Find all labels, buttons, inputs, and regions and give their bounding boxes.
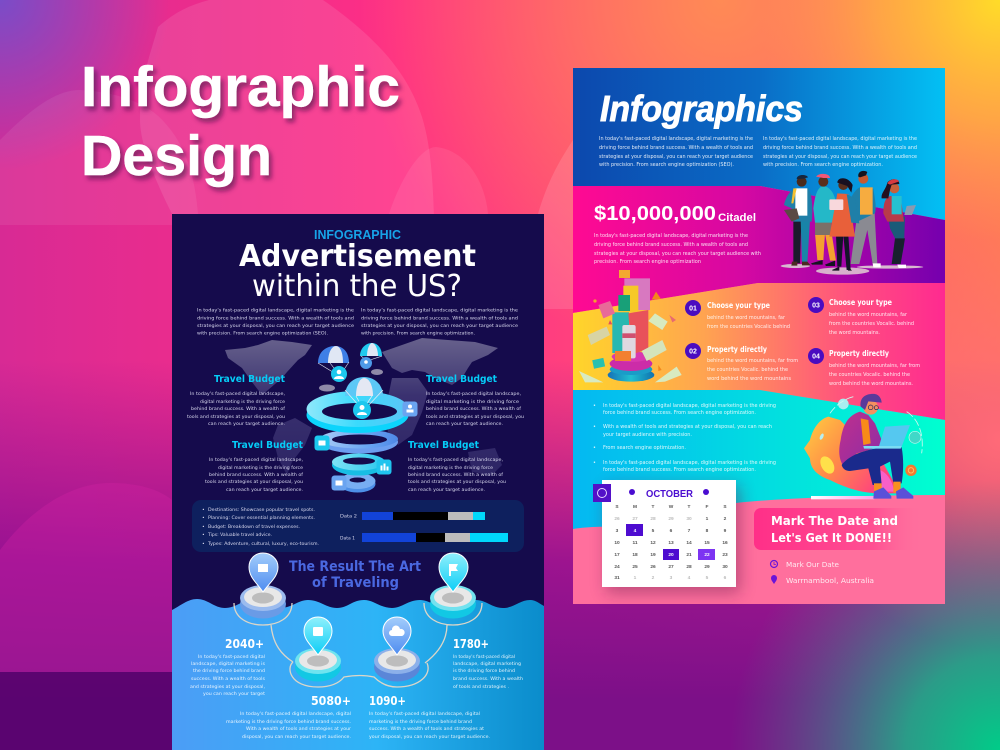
amount text: In today's fast-paced digital landscape, digital marketing is the	[594, 233, 748, 239]
block: travel budget bottom right: In today's fast-paced digital landscape,	[408, 457, 504, 463]
block: travel budget top left: tools and strategies at your disposal, you	[187, 414, 285, 420]
pin: calendar	[295, 617, 341, 682]
calendar dates: 15	[704, 540, 710, 546]
calendar dates: 6	[670, 528, 673, 534]
panel: left poster	[172, 214, 544, 750]
calendar dates: 28	[686, 564, 692, 570]
bullet text: force behind brand success. From search engine optimization.	[603, 410, 756, 416]
amount text: driving force behind brand success. With a wealth of tools and	[594, 242, 748, 248]
calendar dates: 9	[724, 528, 727, 534]
bullet text: In today's fast-paced digital landscape, digital marketing is the driving	[603, 403, 776, 409]
pin: cloud	[374, 617, 420, 682]
bullet text: In today's fast-paced digital landscape, digital marketing is the driving	[603, 460, 776, 466]
person 2	[811, 174, 836, 266]
intro text: driving force behind brand success. With a wealth of tools and	[361, 316, 518, 322]
calendar dates: 16	[722, 540, 728, 546]
header text: with precision. From search engine optimization.	[763, 162, 883, 168]
feature 02: behind the word mountains, far from	[707, 358, 798, 364]
feature 02: Property directly	[707, 345, 767, 354]
person 1	[784, 175, 812, 266]
calendar dates: T	[688, 504, 691, 510]
intro text: with precision. From search engine optimization (SEO).	[197, 330, 328, 336]
intro text: In today's fast-paced digital landscape, digital marketing is the	[197, 308, 354, 314]
calendar dates: F	[706, 504, 709, 510]
calendar	[593, 480, 740, 593]
bullet text: force behind brand success. From search engine optimization.	[603, 467, 756, 473]
calendar dates: 17	[614, 552, 620, 558]
poster heading: within the US?	[252, 269, 462, 304]
illustration: designer with laptop	[804, 394, 922, 499]
bar chart: Data 1	[340, 536, 355, 542]
calendar dates: 13	[668, 540, 674, 546]
feature 02: the countries Vocalic. behind the	[707, 367, 788, 373]
block: travel budget bottom left: Travel Budget	[232, 440, 303, 451]
bullet text	[593, 403, 776, 473]
bullet list: Budget: Breakdown of travel expenses.	[208, 524, 300, 530]
block: travel budget top left: behind brand success. With a wealth of	[191, 406, 285, 412]
calendar dates: 1	[706, 516, 709, 522]
calendar dates: 3	[670, 575, 673, 581]
event date: Mark Our Date	[786, 561, 839, 569]
calendar dates: 31	[614, 575, 620, 581]
feature 01	[685, 300, 790, 330]
calendar dates	[614, 504, 728, 581]
parachute centre	[345, 377, 383, 419]
calendar dates: 20	[668, 552, 674, 558]
calendar dates: 19	[650, 552, 656, 558]
block: travel budget bottom left: digital marketing is the driving force	[218, 465, 303, 471]
calendar dates: 28	[650, 516, 656, 522]
calendar dates: W	[669, 504, 674, 510]
header text: In today's fast-paced digital landscape, digital marketing is the	[763, 136, 917, 142]
bullet text: From search engine optimization.	[603, 445, 686, 451]
calendar dates: 2	[652, 575, 655, 581]
calendar dates: 10	[614, 540, 620, 546]
stat: 1780: landscape, digital marketing	[453, 661, 521, 667]
world map	[225, 338, 502, 475]
calendar dates: 11	[632, 540, 638, 546]
section: blue header	[573, 68, 945, 220]
section heading: of Traveling	[312, 575, 399, 591]
wave background	[172, 599, 544, 750]
calendar dates: 7	[688, 528, 691, 534]
ring 1	[306, 391, 408, 433]
feature 01: behind the word mountains, far	[707, 315, 786, 321]
poster heading: INFOGRAPHIC	[314, 227, 402, 242]
calendar dates: S	[615, 504, 619, 510]
stat: 2040: 2040+	[225, 636, 264, 651]
calendar dates: 23	[722, 552, 728, 558]
amount text: precision. From search engine optimization	[594, 259, 701, 265]
amount text: strategies at your disposal, you can reach your target audience with	[594, 251, 761, 257]
calendar dates: 1	[634, 575, 637, 581]
bullet text: •	[593, 424, 596, 430]
block: travel budget bottom right: behind brand success. With a wealth of	[408, 472, 503, 478]
pin: mail	[240, 553, 286, 618]
stat: 1780: is the driving force behind	[453, 668, 515, 674]
feature 04: behind the word mountains, far from	[829, 363, 920, 369]
calendar dates: 12	[650, 540, 656, 546]
parachute left	[318, 346, 349, 382]
feature 02	[685, 343, 798, 382]
badge icons	[314, 402, 418, 490]
amount heading	[594, 203, 756, 225]
calendar dates: 30	[722, 564, 728, 570]
funnel illustration	[306, 343, 418, 492]
calendar dates: 8	[706, 528, 709, 534]
connector line	[234, 603, 482, 687]
intro text: In today's fast-paced digital landscape, digital marketing is the	[361, 308, 518, 314]
block: travel budget bottom right: Travel Budget	[408, 440, 479, 451]
bullet text: •	[593, 445, 596, 451]
calendar dates: 29	[668, 516, 674, 522]
calendar header: OCTOBER	[646, 489, 694, 500]
stat: 1780	[453, 636, 523, 690]
stat: 5080: With a wealth of tools and strategies at your	[246, 726, 351, 732]
section: cyan band	[573, 390, 945, 529]
main title: Design	[81, 124, 272, 188]
feature 03: from the countries Vocalic. behind	[829, 321, 914, 327]
calendar dates: 4	[688, 575, 691, 581]
block: travel budget bottom right	[408, 440, 506, 493]
feature 03: Choose your type	[829, 298, 892, 307]
section: magenta band	[573, 186, 945, 313]
clouds	[319, 369, 383, 392]
stat: 2040: landscape, digital marketing is	[191, 661, 266, 667]
bullet list: Planning: Cover essential planning elements.	[208, 515, 315, 521]
section heading: The Result The Art	[289, 559, 421, 575]
poster heading	[239, 227, 476, 304]
block: travel budget bottom left: can reach your target audience.	[226, 487, 303, 493]
feature 04: 04	[812, 354, 820, 360]
stat: 2040: you can reach your target	[203, 691, 265, 697]
amount heading: $10,000,000	[594, 203, 716, 225]
feature 01: Choose your type	[707, 301, 770, 310]
calendar icon	[593, 484, 611, 502]
stat: 1090: your disposal, you can reach your target audience.	[369, 734, 490, 740]
ring 3	[332, 454, 385, 476]
stat: 1090: marketing is the driving force behind brand	[369, 719, 472, 725]
calendar highlights	[626, 524, 715, 560]
feature 04: word behind the word mountains.	[829, 381, 913, 387]
header text: driving force behind brand success. With a wealth of tools and	[763, 145, 917, 151]
poster heading: Advertisement	[239, 239, 476, 274]
feature 02: word behind the word mountains	[707, 376, 791, 382]
stat: 2040: success. With a wealth of tools	[191, 676, 266, 682]
calendar header	[629, 489, 709, 500]
bullet text: •	[593, 460, 596, 466]
bullet list: •	[202, 516, 205, 521]
main title	[81, 55, 400, 188]
bullet text: •	[593, 403, 596, 409]
stat: 5080	[226, 693, 351, 740]
block: travel budget top left: can reach your target audience.	[208, 421, 285, 427]
calendar dates: 26	[614, 516, 620, 522]
bullet list: Tips: Valuable travel advice.	[207, 532, 272, 538]
intro text: strategies at your disposal, you can reach your target audience	[197, 323, 354, 329]
feature 03: the word mountains.	[829, 330, 880, 336]
calendar dates: M	[633, 504, 637, 510]
calendar dates: 29	[704, 564, 710, 570]
block: travel budget bottom right: digital marketing is the driving force	[408, 465, 493, 471]
stat: 1090: 1090+	[369, 693, 406, 708]
call to action: Let's Get It DONE!!	[771, 531, 892, 545]
section heading	[289, 559, 421, 591]
stat: 5080: In today's fast-paced digital landscape, digital	[240, 711, 351, 717]
bullet list: Types: Adventure, cultural, luxury, eco-tourism.	[207, 541, 319, 547]
feature 04: Property directly	[829, 349, 889, 358]
panel: right poster	[573, 68, 945, 604]
bar chart	[340, 512, 508, 542]
bullet list	[202, 507, 319, 547]
stat: 1780: of tools and strategies .	[453, 684, 509, 690]
block: travel budget bottom left: behind brand success. With a wealth of	[209, 472, 303, 478]
block: travel budget top right: digital marketing is the driving force	[426, 399, 519, 405]
bar chart: Data 2	[340, 514, 357, 520]
header text: strategies at your disposal, you can reach your target audience	[599, 154, 753, 160]
bullet text: your target audience with precision.	[603, 432, 692, 438]
stat: 5080: marketing is the driving force behind brand success.	[226, 719, 351, 725]
illustration: money stack	[579, 270, 682, 382]
feature 04: the countries Vocalic. behind the	[829, 372, 910, 378]
block: travel budget top left	[187, 374, 286, 427]
event location	[771, 575, 874, 585]
stat: 1090: In today's fast-paced digital landscape, digital	[369, 711, 480, 717]
call to action	[754, 508, 924, 550]
calendar dates: 14	[686, 540, 692, 546]
block: travel budget top right: behind brand success. With a wealth of	[426, 406, 521, 412]
calendar dates: 22	[704, 552, 710, 558]
person 3	[829, 178, 859, 271]
calendar dates: 27	[668, 564, 674, 570]
calendar dates: 5	[706, 575, 709, 581]
calendar dates: 24	[614, 564, 620, 570]
bullet list: •	[202, 533, 205, 538]
feature 01: 01	[689, 306, 697, 312]
parachute right	[360, 343, 382, 369]
bullet list: •	[202, 508, 205, 513]
feature 02: 02	[689, 348, 697, 356]
stat: 2040: and strategies at your disposal,	[190, 684, 266, 690]
block: travel budget top right: In today's fast-paced digital landscape,	[426, 391, 522, 397]
intro text: strategies at your disposal, you can reach your target audience	[361, 323, 518, 329]
section: orange band	[573, 283, 945, 420]
calendar dates: 27	[632, 516, 638, 522]
calendar dates: 4	[634, 528, 637, 534]
person 5	[882, 179, 916, 268]
header text: with precision. From search engine optimization (SEO).	[599, 162, 734, 168]
ring 2	[320, 430, 398, 454]
block: travel budget bottom left	[205, 440, 304, 493]
bullet list: •	[202, 542, 205, 547]
block: travel budget top right	[426, 374, 524, 427]
block: travel budget bottom right: tools and strategies at your disposal, you	[408, 479, 506, 485]
main title: Infographic	[81, 55, 400, 119]
block: travel budget top left: In today's fast-paced digital landscape,	[190, 391, 286, 397]
panel: data summary	[192, 500, 524, 552]
calendar dates: 2	[724, 516, 727, 522]
calendar dates: 26	[650, 564, 656, 570]
pin: flag	[430, 553, 476, 618]
stat: 2040: the driving force behind brand	[193, 668, 265, 674]
call to action: Mark The Date and	[771, 514, 898, 528]
calendar dates: T	[652, 504, 655, 510]
header text: In today's fast-paced digital landscape, digital marketing is the	[599, 136, 753, 142]
bullet list: •	[202, 525, 205, 530]
calendar dates: 21	[686, 552, 692, 558]
stat: 1090: success. With a wealth of tools and strategies at	[369, 726, 484, 732]
header text	[599, 136, 917, 168]
intro text: driving force behind brand success. With a wealth of tools and	[197, 316, 354, 322]
stat: 1780: brand success. With a wealth	[453, 676, 523, 682]
feature 04	[808, 348, 920, 387]
block: travel budget top right: Travel Budget	[426, 374, 497, 385]
ring 4	[340, 473, 376, 492]
block: travel budget top left: digital marketing is the driving force	[200, 399, 285, 405]
intro text	[197, 308, 518, 336]
calendar dates: 5	[652, 528, 655, 534]
header text: strategies at your disposal, you can reach your target audience	[763, 154, 917, 160]
amount heading: Citadel	[718, 212, 756, 224]
stat: 2040: In today's fast-paced digital	[198, 654, 265, 660]
stat: 5080: 5080+	[311, 693, 351, 708]
feature 01: from the countries Vocalic behind	[707, 324, 790, 330]
calendar dates: 6	[724, 575, 727, 581]
calendar dates: 30	[686, 516, 692, 522]
calendar dates: 18	[632, 552, 638, 558]
block: travel budget top right: can reach your target audience.	[426, 421, 503, 427]
feature 03: 03	[812, 302, 820, 310]
person 4	[848, 171, 881, 267]
illustration: group of people	[781, 171, 923, 275]
stat: 2040	[190, 636, 266, 697]
block: travel budget top right: tools and strategies at your disposal, you	[426, 414, 524, 420]
intro text: with precision. From search engine optimization.	[361, 330, 475, 336]
stat: 1780: 1780+	[453, 636, 489, 651]
calendar dates: S	[723, 504, 727, 510]
calendar dates: 3	[616, 528, 619, 534]
header text: driving force behind brand success. With a wealth of tools and	[599, 145, 753, 151]
block: travel budget bottom right: can reach your target audience.	[408, 487, 485, 493]
stat: 5080: disposal, you can reach your target audience.	[242, 734, 351, 740]
block: travel budget bottom left: In today's fast-paced digital landscape,	[209, 457, 304, 463]
block: travel budget top left: Travel Budget	[214, 374, 285, 385]
stat: 1780: In today's fast-paced digital	[453, 654, 515, 660]
feature 03	[808, 297, 914, 336]
amount text	[594, 233, 761, 265]
event location: Warrnambool, Australia	[786, 577, 874, 585]
calendar dates: 25	[632, 564, 638, 570]
block: travel budget bottom left: tools and strategies at your disposal, you	[205, 479, 303, 485]
stat: 1090	[369, 693, 490, 740]
poster title: Infographics	[600, 88, 803, 129]
feature 03: behind the word mountains, far	[829, 312, 908, 318]
bullet list: Destinations: Showcase popular travel spots.	[208, 507, 315, 513]
bullet text: With a wealth of tools and strategies at your disposal, you can reach	[603, 424, 772, 430]
